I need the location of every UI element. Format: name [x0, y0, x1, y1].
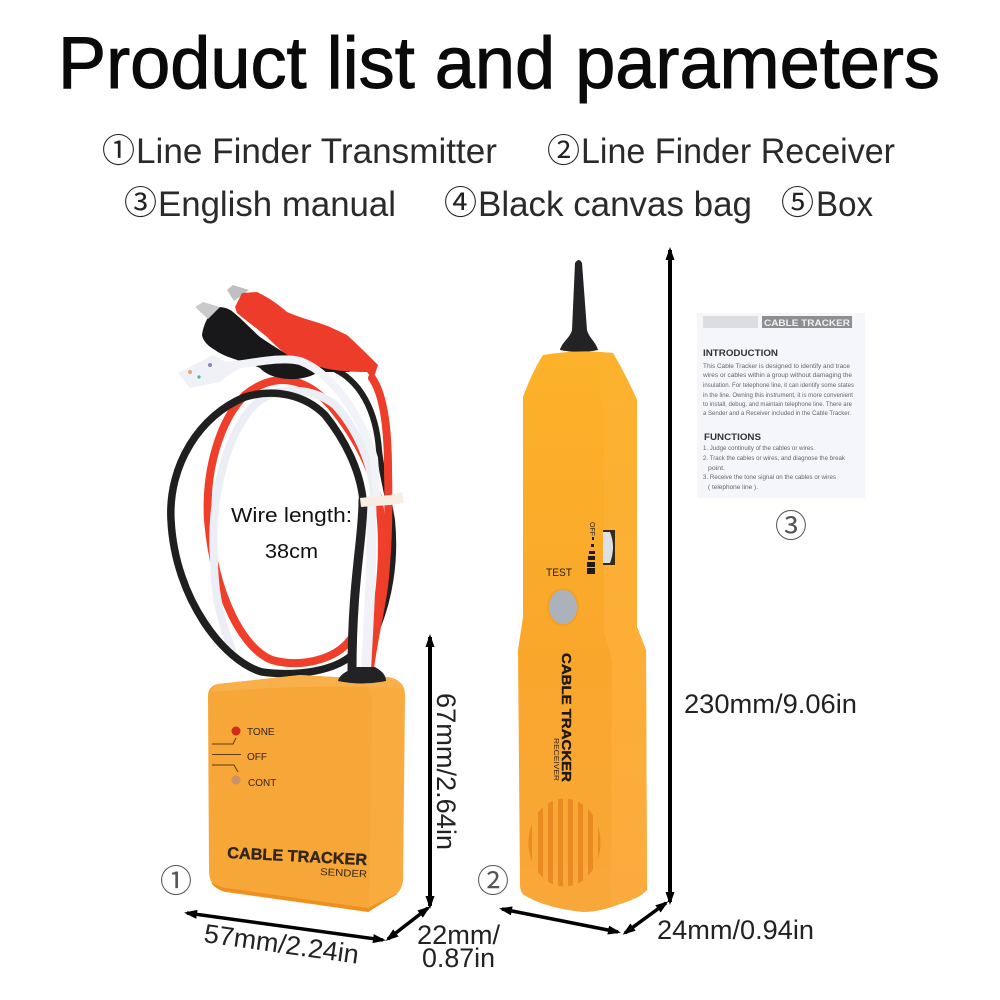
cable tracker brand: CABLE TRACKER [227, 845, 368, 869]
black wire loop [171, 393, 363, 674]
introduction text: This Cable Tracker is designed to identify and trace [703, 363, 850, 370]
red alligator clip [235, 292, 378, 380]
front face [208, 675, 372, 912]
off label: OFF [588, 522, 595, 536]
functions list: 2. Track the cables or wires, and diagnose the break [703, 455, 846, 462]
paper [697, 313, 865, 498]
item 5: Box: Box [816, 185, 873, 224]
dimension: 22mm [417, 920, 501, 973]
speaker grille [528, 795, 602, 890]
item 1: Line Finder Transmitter: ① [102, 124, 135, 172]
introduction text: in the line. Owning this instrument, it is more convenient [703, 392, 853, 399]
test label: TEST [546, 567, 572, 579]
functions list: 3. Receive the tone signal on the cables or wires [703, 474, 837, 481]
functions list [703, 445, 846, 491]
item 3: English manual: English manual [158, 185, 396, 224]
item 3: English manual: ③ [124, 176, 157, 224]
functions list: point. [708, 465, 725, 472]
item 4: Black canvas bag: Black canvas bag [478, 185, 752, 224]
arrow: transmitter depth [388, 908, 428, 939]
side panel [300, 677, 405, 912]
dimension: 67mm: 67mm/2.64in [431, 693, 461, 850]
receiver body [518, 351, 647, 912]
callout number 1: ① [160, 856, 192, 902]
introduction text: a Sender and a Receiver included in the Cable Tracker. [703, 410, 851, 417]
dimension: 230mm: 230mm/9.06in [684, 689, 857, 719]
title: Product list and parameters [58, 23, 940, 104]
test button [547, 588, 579, 626]
receiver label: RECEIVER [552, 738, 561, 782]
signal level bars [587, 537, 595, 574]
metal clip tips [195, 285, 249, 319]
wire length label: 38cm [265, 541, 318, 563]
red clip wire [370, 378, 388, 668]
cont LED [232, 776, 240, 784]
introduction text: insulation. For telephone line, it can identify some states [703, 382, 855, 389]
switch position lines [212, 738, 241, 772]
sender label: SENDER [320, 867, 367, 880]
off label: OFF [247, 752, 267, 763]
arrow: receiver height [668, 250, 672, 902]
RJ11 connector [178, 355, 243, 388]
outer black wire [336, 370, 393, 636]
arrow: receiver width [502, 909, 618, 932]
dimension: 57mm: 57mm/2.24in [202, 918, 361, 970]
probe tip [560, 260, 598, 352]
lower white strand [366, 500, 372, 670]
arrow: transmitter width [187, 913, 383, 940]
wire length label: Wire length: [231, 505, 352, 527]
introduction text: to install, debug, and maintain telephone line. There are [703, 401, 852, 408]
arrow: receiver depth [625, 903, 666, 933]
item 1: Line Finder Transmitter: Line Finder Transmitter [136, 132, 497, 171]
dimension: 24mm: 24mm/0.94in [657, 915, 814, 945]
callout number 3: ③ [775, 501, 807, 547]
bottom edge highlight [211, 882, 398, 912]
cable tie [360, 492, 404, 507]
callout number 2: ② [477, 856, 509, 902]
introduction heading: INTRODUCTION [703, 348, 778, 358]
receiver [518, 260, 647, 912]
dimension arrows [187, 250, 670, 940]
English manual sheet [697, 313, 865, 498]
wires and clips of the transmitter [171, 285, 404, 674]
functions list: 1. Judge continuity of the cables or wires. [703, 445, 815, 452]
white wire loop [213, 391, 374, 650]
manual header: CABLE TRACKER [764, 318, 850, 329]
white clip wire [225, 359, 377, 496]
introduction text [702, 363, 855, 417]
tone label: TONE [247, 727, 275, 738]
item 2: Line Finder Receiver: ② [547, 124, 580, 172]
lower black strand [352, 500, 363, 672]
functions heading: FUNCTIONS [704, 432, 761, 443]
dimension: 22mm: 0.87in [422, 943, 495, 973]
red wire loop [208, 380, 382, 663]
item 2: Line Finder Receiver: Line Finder Receiver [581, 132, 895, 171]
transmitter body [208, 667, 405, 912]
introduction text: wires or cables within a group without damaging the [702, 372, 852, 379]
item 5: Box: ⑤ [781, 176, 814, 224]
tone LED [232, 726, 240, 736]
item 5: Box [781, 176, 873, 224]
functions list: ( telephone line ). [708, 484, 758, 491]
wire length label [231, 505, 352, 563]
arrow: transmitter height [428, 637, 432, 906]
top edge highlight [212, 675, 403, 692]
cont label: CONT [248, 778, 276, 789]
dimension: 22mm: 22mm/ [417, 920, 501, 950]
cable grommet [338, 667, 386, 684]
black alligator clip [202, 307, 350, 379]
cable tracker brand: CABLE TRACKER [559, 653, 574, 783]
side panel [600, 352, 647, 907]
item 4: Black canvas bag: ④ [444, 176, 477, 224]
parts list [102, 124, 895, 224]
volume wheel [603, 530, 615, 565]
manual header [703, 316, 852, 329]
